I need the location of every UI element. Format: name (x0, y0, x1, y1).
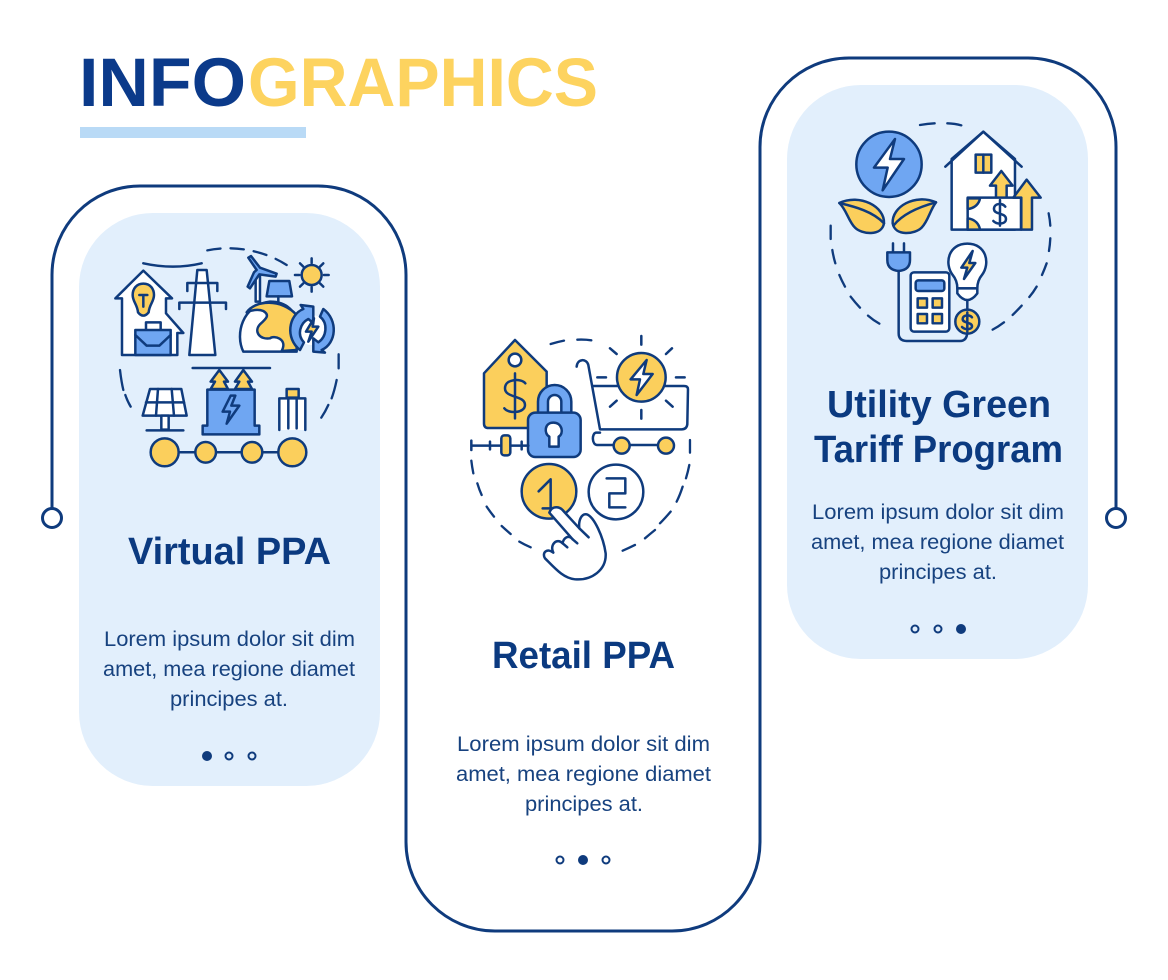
text block: principes at. (879, 561, 997, 584)
title (79, 44, 598, 121)
icon: renewable energy grid (115, 248, 339, 466)
panel background (787, 85, 1088, 659)
heading: Tariff Program (814, 429, 1063, 471)
title: INFO (79, 44, 246, 121)
panel background (79, 213, 380, 786)
heading: Utility Green (827, 384, 1051, 426)
text block: principes at. (170, 688, 288, 711)
text block (456, 733, 711, 816)
text block: Lorem ipsum dolor sit dim (104, 628, 355, 651)
panel: Virtual PPA (79, 213, 380, 786)
panel: Utility Green Tariff Program (787, 85, 1088, 659)
text block (811, 501, 1064, 584)
panel: Retail PPA (456, 336, 711, 864)
text block: Lorem ipsum dolor sit dim (457, 733, 710, 756)
text block: amet, mea regione diamet (811, 531, 1064, 554)
heading: Virtual PPA (128, 531, 331, 573)
heading: Retail PPA (492, 635, 675, 677)
pagination dots (203, 752, 256, 760)
text block (103, 628, 355, 711)
title: GRAPHICS (248, 44, 598, 121)
heading (814, 384, 1063, 471)
text block: amet, mea regione diamet (456, 763, 711, 786)
icon: green tariff (831, 123, 1050, 341)
pagination dots (556, 856, 610, 864)
pagination dots (912, 625, 965, 633)
title underline (80, 127, 306, 138)
text block: amet, mea regione diamet (103, 658, 355, 681)
text block: principes at. (525, 793, 643, 816)
icon: retail purchase (471, 336, 690, 579)
text block: Lorem ipsum dolor sit dim (812, 501, 1064, 524)
